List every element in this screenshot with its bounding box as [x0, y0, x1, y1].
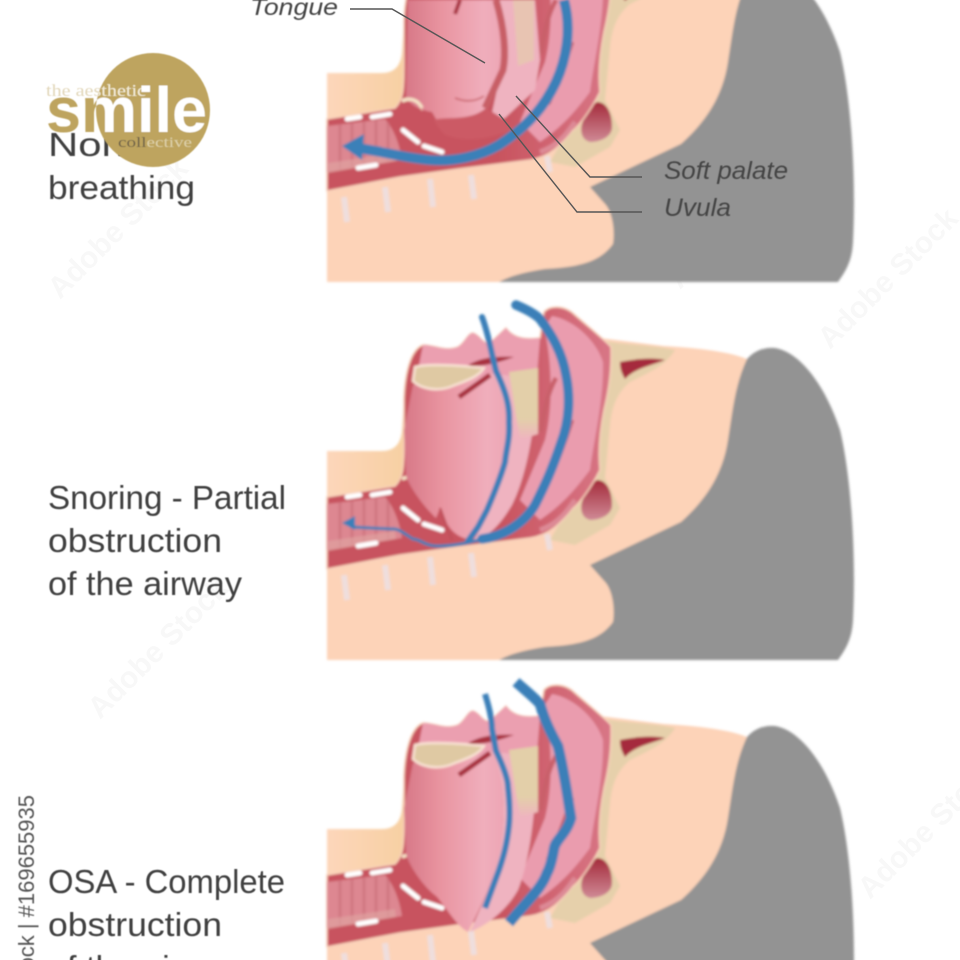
arrowhead: snoring	[342, 516, 355, 530]
tongue and pharynx: normal	[402, 0, 540, 139]
panel: OSA diagram	[327, 682, 854, 960]
watermark: Adobe Stock	[42, 152, 195, 305]
logo: the aesthetic smile collective: the aesthetic	[46, 81, 147, 100]
panel: snoring diagram	[327, 305, 854, 660]
label: Soft palate: Soft palate	[664, 157, 788, 185]
label: Tongue	[250, 0, 485, 63]
heading: OSA	[48, 863, 285, 960]
soft palate: snoring	[472, 374, 537, 542]
tongue: snoring	[404, 374, 508, 540]
watermark: Adobe Stock	[662, 142, 815, 295]
watermark: Adobe Stock	[82, 572, 235, 725]
tongue: OSA	[404, 752, 504, 932]
epiglottis strokes: snoring	[440, 508, 452, 540]
panel: normal breathing diagram	[327, 0, 854, 282]
logo: the aesthetic smile collective: smile	[46, 74, 207, 146]
watermark	[42, 142, 960, 905]
heading: OSA: OSA - Complete	[48, 863, 285, 900]
airflow: snoring	[352, 305, 569, 546]
heading: normal breathing	[48, 126, 195, 206]
logo: the aesthetic smile collective: smile	[46, 74, 207, 146]
logo: the aesthetic smile collective	[46, 53, 210, 167]
heading: snoring: Snoring - Partial	[48, 479, 286, 516]
heading: snoring	[48, 479, 286, 602]
heading: snoring: obstruction	[48, 522, 222, 559]
heading: normal breathing: breathing	[48, 169, 195, 206]
label: Soft palate	[516, 96, 788, 185]
soft palate: OSA	[470, 752, 537, 932]
airflow: OSA	[485, 682, 571, 923]
heading: snoring: of the airway	[48, 565, 243, 602]
heading: normal breathing: Normal	[48, 126, 183, 163]
heading: OSA: obstruction	[48, 906, 222, 943]
logo: the aesthetic smile collective: coll ective	[118, 135, 192, 151]
airflow arrow: normal	[342, 0, 568, 160]
label: Uvula	[499, 114, 731, 222]
logo: the aesthetic smile collective: the aesthetic	[46, 81, 147, 100]
label: Uvula: Uvula	[664, 194, 731, 222]
